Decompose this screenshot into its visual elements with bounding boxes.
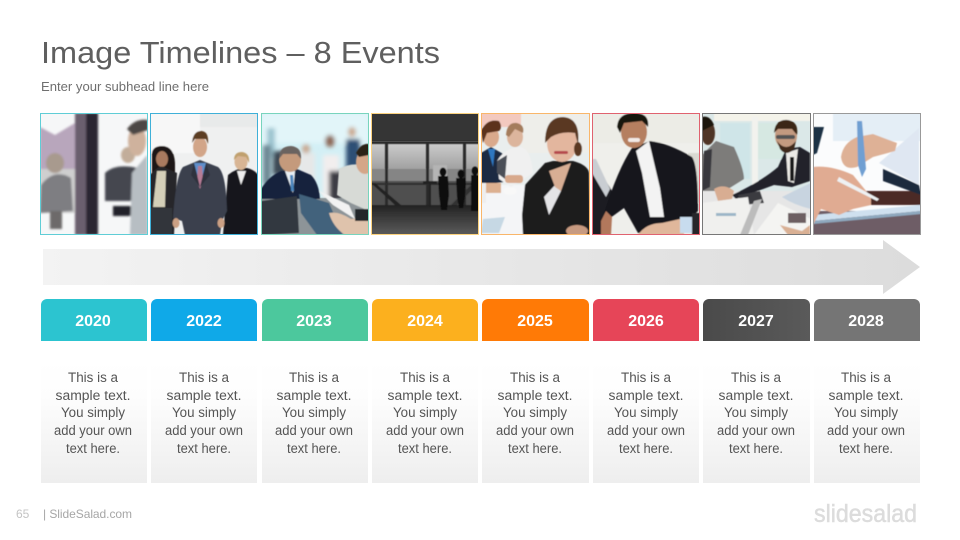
year tab 2025: 2025 bbox=[517, 313, 553, 330]
photo 7: men in discussion at table bbox=[701, 113, 811, 235]
year tab 2025 bbox=[482, 299, 589, 341]
text panel 2024 bbox=[372, 360, 478, 483]
photo 1: blurred office through glass bbox=[40, 113, 148, 235]
text panel 2023: add your own bbox=[275, 423, 353, 438]
year tab 2026 bbox=[593, 299, 699, 341]
text panel 2023: This is a bbox=[289, 370, 339, 385]
text panel 2027: text here. bbox=[729, 441, 783, 456]
text panel 2026: This is a bbox=[621, 370, 671, 385]
year tab 2026: 2026 bbox=[628, 313, 664, 330]
text panel 2027 bbox=[703, 360, 810, 483]
photo 4: black and white skyline with silhouettes bbox=[371, 113, 479, 235]
year tab 2028 bbox=[814, 299, 920, 341]
year tab 2027 bbox=[703, 299, 810, 341]
text panel 2028: text here. bbox=[839, 441, 893, 456]
photo 6: businesswoman shaking hands bbox=[592, 113, 700, 235]
photo 5: smiling businesswoman at table bbox=[481, 113, 590, 237]
year tab 2020: 2020 bbox=[75, 313, 111, 330]
year tab 2022 bbox=[151, 299, 257, 341]
text panel 2023 bbox=[262, 360, 368, 483]
logo wordmark: slidesalad bbox=[814, 500, 917, 528]
subhead: Enter your subhead line here bbox=[41, 79, 209, 94]
year tab 2024: 2024 bbox=[407, 313, 443, 330]
text panel 2020: text here. bbox=[66, 441, 120, 456]
text panel 2024: sample text. bbox=[388, 388, 462, 403]
text panel 2027: sample text. bbox=[718, 388, 794, 403]
text panel 2025: sample text. bbox=[498, 388, 572, 403]
text panel 2025: This is a bbox=[510, 370, 560, 385]
text panel 2025 bbox=[482, 360, 589, 483]
text panel 2024: add your own bbox=[386, 423, 464, 438]
year tab 2028: 2028 bbox=[848, 313, 884, 330]
text panel 2025: add your own bbox=[496, 423, 574, 438]
text panel 2028: This is a bbox=[841, 370, 891, 385]
year tab 2023 bbox=[262, 299, 368, 341]
text panel 2023: You simply bbox=[282, 405, 346, 420]
text panel 2020: You simply bbox=[61, 405, 125, 420]
text panel 2023: sample text. bbox=[276, 388, 352, 403]
text panel 2028: You simply bbox=[834, 405, 898, 420]
text panel 2024: text here. bbox=[398, 441, 452, 456]
photo 8: hands with pen and documents bbox=[813, 113, 921, 235]
text panel 2027: add your own bbox=[717, 423, 795, 438]
photo 3: meeting with laptop and folder bbox=[261, 113, 374, 235]
page number: 65 bbox=[16, 507, 30, 521]
year tab 2024 bbox=[372, 299, 478, 341]
text panel 2024: You simply bbox=[393, 405, 457, 420]
text panel 2028: add your own bbox=[827, 423, 905, 438]
text panel 2022: text here. bbox=[177, 441, 231, 456]
text panel 2025: text here. bbox=[508, 441, 562, 456]
text panel 2020: This is a bbox=[68, 370, 118, 385]
year tab 2023: 2023 bbox=[296, 313, 332, 330]
text panel 2022: add your own bbox=[165, 423, 243, 438]
text panel 2028 bbox=[814, 360, 920, 483]
text panel 2026: You simply bbox=[614, 405, 678, 420]
text panel 2023: text here. bbox=[287, 441, 341, 456]
text panel 2027: This is a bbox=[731, 370, 781, 385]
title: Image Timelines – 8 Events bbox=[41, 35, 440, 70]
year tab 2022: 2022 bbox=[186, 313, 222, 330]
text panel 2026 bbox=[593, 360, 699, 483]
footer site name: | SlideSalad.com bbox=[43, 507, 132, 521]
text panel 2020: add your own bbox=[54, 423, 132, 438]
year tab 2027: 2027 bbox=[738, 313, 774, 330]
year tab 2020 bbox=[41, 299, 147, 341]
text panel 2022: You simply bbox=[172, 405, 236, 420]
text panel 2022 bbox=[151, 360, 257, 483]
text panel 2026: sample text. bbox=[608, 388, 684, 403]
text panel 2026: text here. bbox=[619, 441, 673, 456]
text panel 2025: You simply bbox=[503, 405, 567, 420]
text panel 2027: You simply bbox=[724, 405, 788, 420]
text panel 2026: add your own bbox=[607, 423, 685, 438]
timeline arrow bbox=[43, 240, 920, 294]
text panel 2020: sample text. bbox=[56, 388, 130, 403]
text panel 2020 bbox=[41, 360, 147, 483]
photo 2: three business people walking bbox=[150, 113, 258, 235]
text panel 2024: This is a bbox=[400, 370, 450, 385]
text panel 2022: sample text. bbox=[166, 388, 242, 403]
text panel 2028: sample text. bbox=[828, 388, 904, 403]
text panel 2022: This is a bbox=[179, 370, 229, 385]
